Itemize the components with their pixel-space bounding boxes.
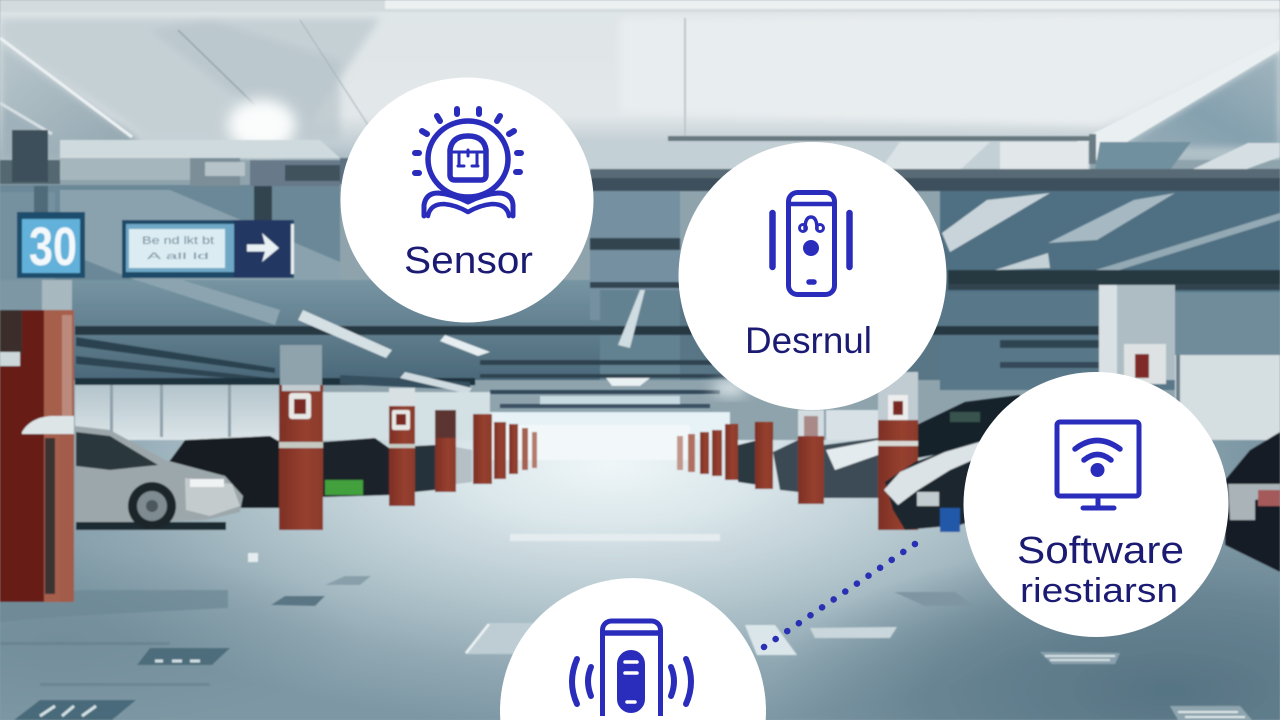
label: software: Software [1017,530,1184,572]
mid ceiling, left [0,185,680,380]
node: sensor [340,78,594,322]
dotted connector line [764,544,915,647]
node: software [964,372,1228,637]
parking signs: level 30 and direction arrow: A all ld [147,251,209,261]
ceiling [0,0,1280,172]
right red pillars [677,372,918,530]
left parked cars [75,426,472,530]
far right car [1225,432,1280,572]
parking signs: level 30 and direction arrow [17,212,294,278]
label: sensor: Sensor [404,240,533,282]
back wall and far end glow [74,354,1280,442]
icon: phone with signal waves [572,621,691,716]
parking signs: level 30 and direction arrow: 30 [29,217,77,277]
icon: sensor [415,109,521,216]
grey pillar with sign, upper right [1099,285,1175,384]
label: desrnul: Desrnul [745,320,872,361]
floor [0,425,1280,720]
white car and bin by pillar [883,440,980,533]
node: phone signal [500,578,766,720]
mid ceiling, right [600,185,1280,390]
node: desrnul [678,142,946,410]
left red pillars [0,280,537,602]
icon: monitor with wifi [1057,422,1139,508]
overhead pipes and beams [0,18,1280,408]
label: second line: riestiarsn [1020,572,1178,610]
parking signs: level 30 and direction arrow: Be nd lkt bt [142,235,214,247]
right parked cars [738,395,1020,498]
icon: phone [772,192,850,294]
